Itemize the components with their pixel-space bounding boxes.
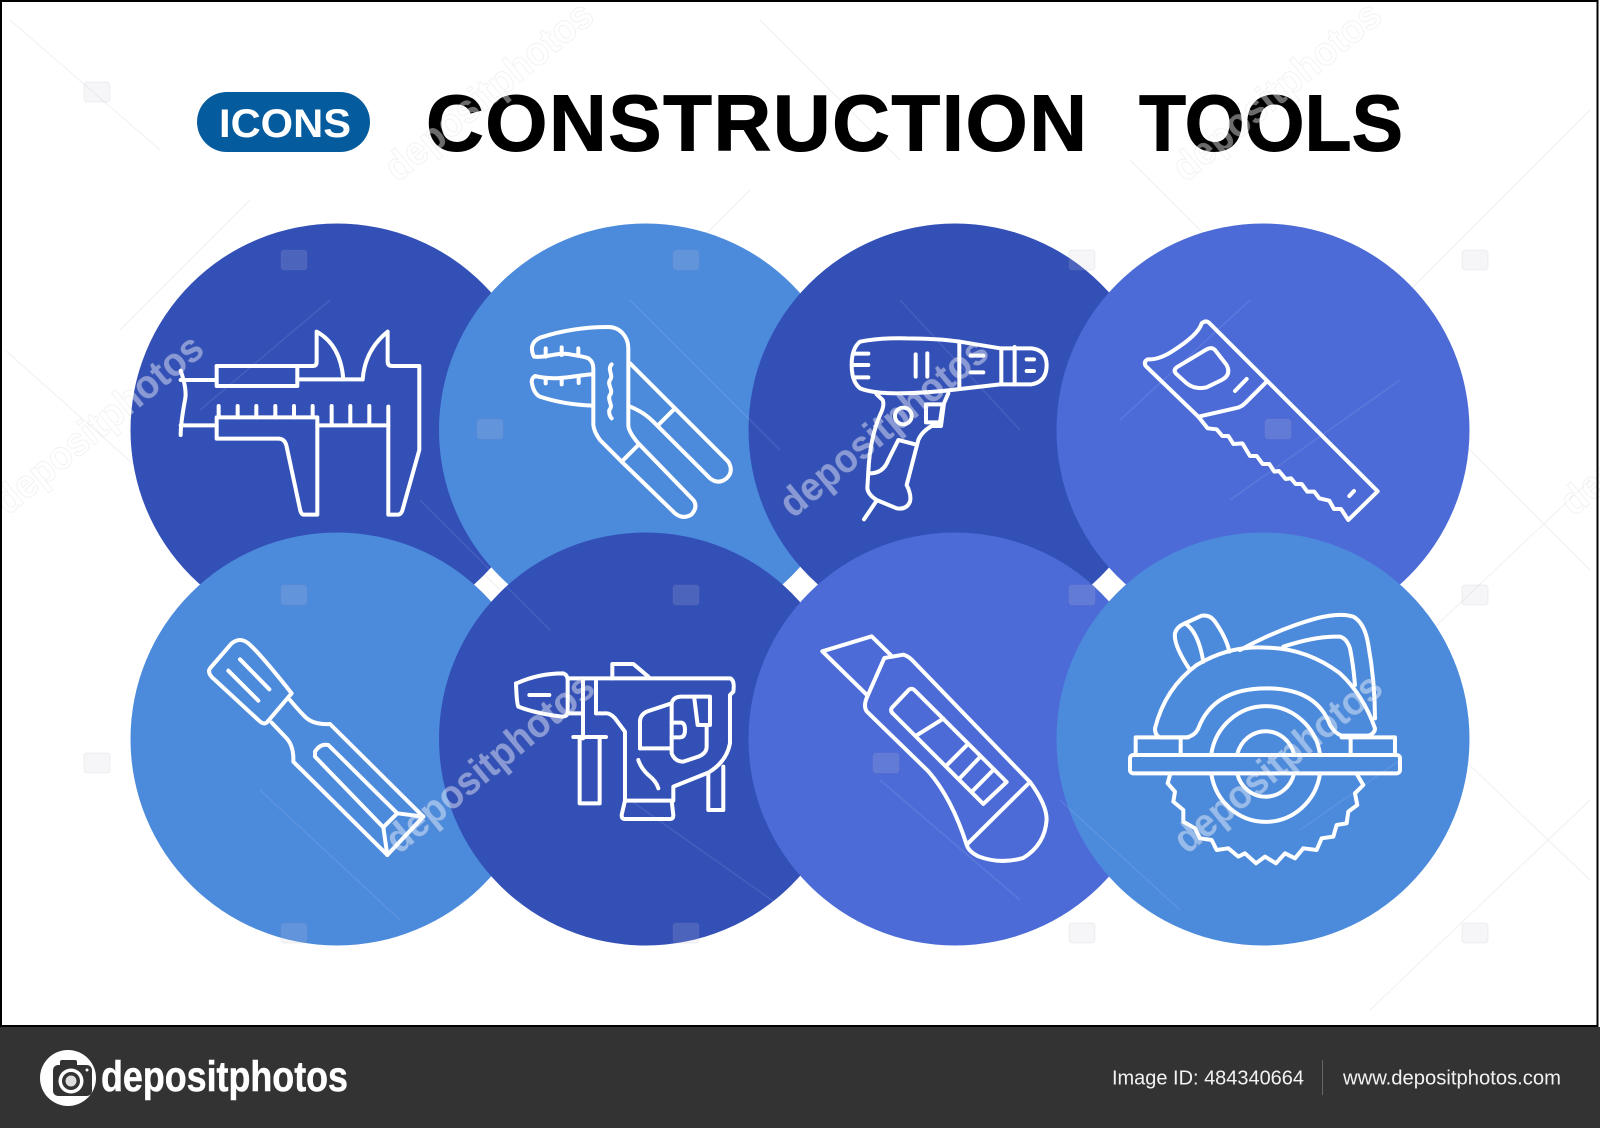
circle: hand saw background — [1056, 224, 1470, 636]
icon: utility knife — [822, 636, 1047, 861]
title — [426, 78, 1403, 168]
icon: water pump pliers — [532, 327, 731, 517]
circle: heat gun background — [748, 224, 1162, 636]
watermark: depositphotos — [771, 329, 997, 526]
pill badge: ICONS — [197, 92, 370, 152]
icon: calipers — [181, 332, 419, 515]
panel: circle grid — [130, 224, 1470, 946]
circle: circular saw background — [1056, 532, 1470, 946]
circle: calipers background — [130, 224, 544, 636]
circle: hammer drill background — [439, 532, 852, 946]
icon: chisel — [209, 640, 423, 855]
icon: depositphotos logo — [40, 1050, 96, 1106]
watermark: depositphotos — [377, 665, 603, 862]
footer bar — [0, 1027, 1600, 1128]
title: CONSTRUCTION — [426, 78, 1087, 168]
pill badge: ICONS: ICONS — [219, 102, 351, 146]
icon: heat gun — [852, 338, 1047, 519]
icon: hand saw — [1145, 321, 1378, 520]
icon: hammer drill — [516, 664, 734, 819]
title: TOOLS — [1139, 78, 1403, 168]
image id: Image ID: 484340664 — [1112, 1066, 1304, 1090]
icon: circular saw — [1130, 615, 1400, 863]
website url: www.depositphotos.com — [1342, 1066, 1561, 1090]
watermark: depositphotos — [1165, 665, 1391, 862]
circle: chisel background — [130, 532, 544, 946]
circle: pliers background — [439, 224, 852, 636]
logo wordmark: depositphotos — [101, 1053, 348, 1101]
circle: utility knife background — [748, 532, 1162, 946]
